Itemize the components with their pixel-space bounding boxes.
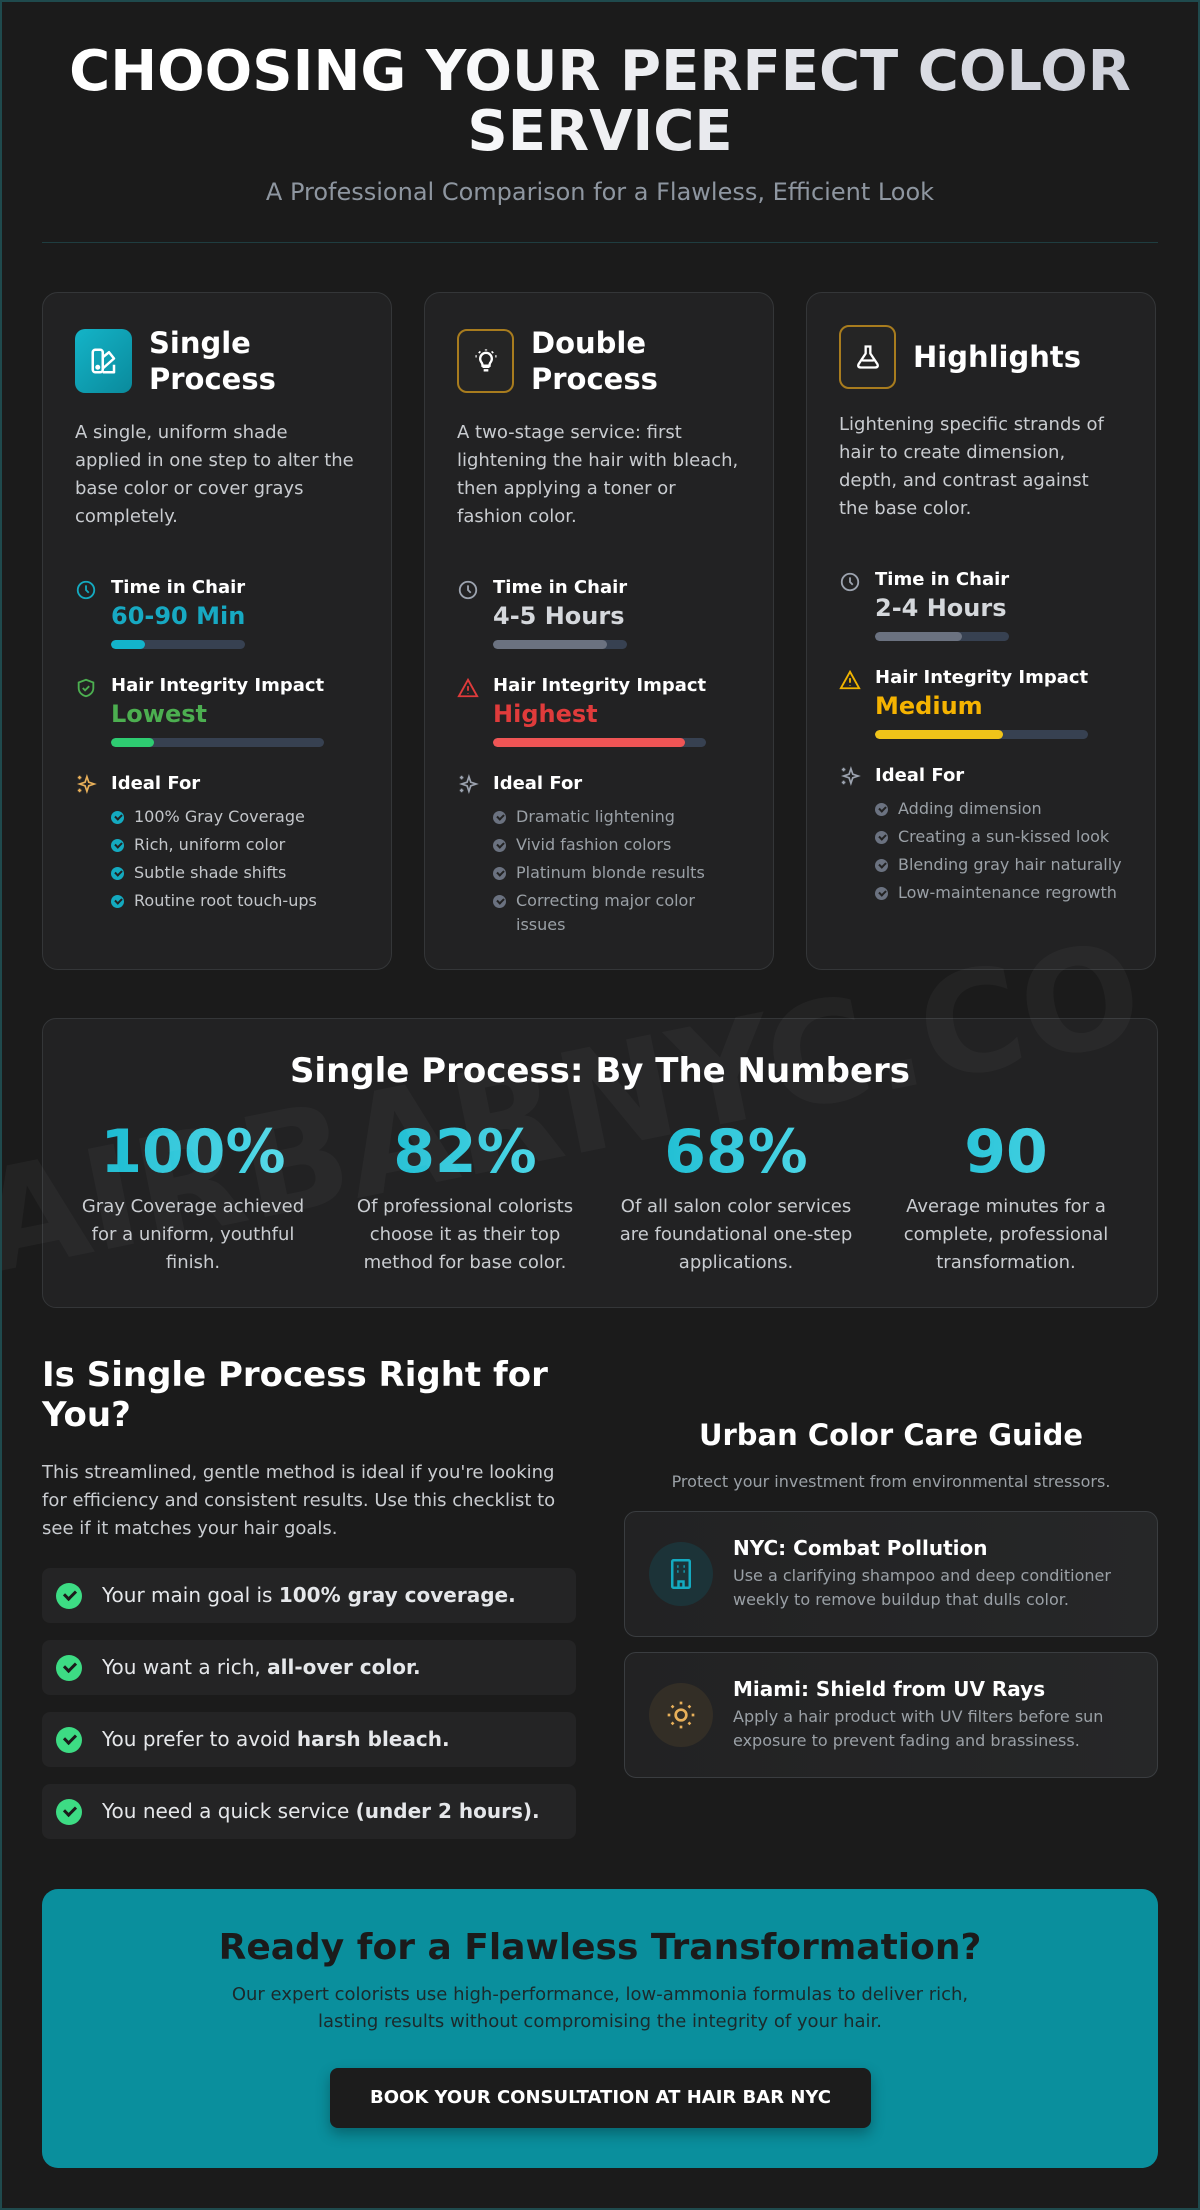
care card: Miami: Apply a hair product with UV filters before sun exposure to prevent fading and brassiness. [733,1707,1103,1750]
stat 100%: 100% [100,1117,286,1187]
care card: NYC [624,1511,1158,1637]
description: applied in one step to alter the [75,450,354,471]
title: CHOOSING YOUR PERFECT COLOR [69,39,1131,104]
description: A two-stage service: first [457,422,682,443]
description: hair to create dimension, [839,442,1065,463]
panel: highlights [806,292,1156,970]
stat 100%: finish. [166,1252,220,1273]
panel: highlights: 2-4 Hours [875,594,1006,622]
metric: integrity [457,675,706,747]
panel: highlights: Low-maintenance regrowth [898,883,1117,902]
panel: single process [42,292,392,970]
panel: single process: Rich, uniform color [134,835,285,854]
CTA text: Our expert colorists use high-performance, low-ammonia formulas to deliver rich, [232,1984,968,2005]
stat 82%: 82% [393,1117,537,1187]
care card: Miami: Miami: Shield from UV Rays [733,1677,1045,1701]
stat 68% [620,1117,852,1273]
panel: double process: 4-5 Hours [493,602,624,630]
care card: NYC: NYC: Combat Pollution [733,1536,987,1560]
panel: double process: Highest [493,700,598,728]
stats heading: Single Process: By The Numbers [290,1051,910,1091]
description: fashion color. [457,506,577,527]
checklist item 1: Your main goal is 100% gray coverage. [102,1583,516,1607]
metric: integrity [839,667,1088,739]
metric: time [840,569,1010,641]
stat 68%: applications. [679,1252,793,1273]
icon: bulb [457,329,514,393]
heading: urban color care: Urban Color Care Guide [699,1418,1083,1452]
stat 90: complete, professional [904,1224,1108,1245]
card title [531,326,658,396]
checklist item 2 [42,1640,576,1695]
stat 82%: choose it as their top [370,1224,560,1245]
panel: highlights: Hair Integrity Impact [875,667,1088,688]
text block: intro: see if it matches your hair goals. [42,1518,338,1539]
checklist item 3 [42,1712,576,1767]
stat 100%: for a uniform, youthful [92,1224,294,1245]
stat 90 [904,1117,1108,1273]
panel: single process: 100% Gray Coverage [134,807,305,826]
stat 100%: Gray Coverage achieved [82,1196,304,1217]
stat 90: Average minutes for a [906,1196,1106,1217]
ideal for list [459,773,705,934]
stat 100% [82,1117,304,1273]
description [75,422,354,527]
panel: double process: Ideal For [493,773,582,794]
description: then applying a toner or [457,478,676,499]
checklist item 4 [42,1784,576,1839]
card title: Double [531,326,646,360]
stat 82% [357,1117,573,1273]
panel: double process: Hair Integrity Impact [493,675,706,696]
panel: double process: Correcting major color [516,891,695,910]
icon: swatch [75,329,132,393]
panel: single process: Hair Integrity Impact [111,675,324,696]
stat 68%: are foundational one-step [620,1224,852,1245]
card title [149,326,276,396]
text block: intro: This streamlined, gentle method is ideal if you're looking [42,1462,554,1483]
description: lightening the hair with bleach, [457,450,738,471]
panel: single process: Ideal For [111,773,200,794]
metric: time [458,577,628,649]
text block: intro: for efficiency and consistent results. Use this checklist to [42,1490,555,1511]
panel: double process [424,292,774,970]
description [457,422,738,527]
description: A single, uniform shade [75,422,288,443]
panel: single process: Routine root touch-ups [134,891,317,910]
card title: Highlights [913,340,1081,374]
title [0,42,1200,162]
heading: is single process right: You? [42,1395,131,1435]
checklist item 4: You need a quick service (under 2 hours). [102,1799,540,1823]
panel: highlights: Time in Chair [875,569,1009,590]
CTA panel [42,1889,1158,2168]
heading: is single process right: Is Single Process Right for [42,1355,548,1395]
panel: stats [42,1018,1158,1308]
CTA button: BOOK YOUR CONSULTATION AT HAIR BAR NYC [370,2087,831,2108]
panel: highlights: Medium [875,692,983,720]
stat 90: 90 [964,1117,1048,1187]
heading: is single process right [42,1355,548,1435]
description [839,414,1104,519]
panel: double process: Dramatic lightening [516,807,675,826]
description: the base color. [839,498,971,519]
icon: building [649,1542,713,1606]
stat 82%: method for base color. [364,1252,566,1273]
checklist item 3: You prefer to avoid harsh bleach. [102,1727,450,1751]
ideal for list [841,765,1122,902]
icon: sun [649,1683,713,1747]
panel: double process: Vivid fashion colors [516,835,671,854]
card title: Single [149,326,251,360]
CTA text [232,1984,968,2032]
panel: highlights: Blending gray hair naturally [898,855,1122,874]
care card: Miami [624,1652,1158,1778]
icon: flask [839,325,896,389]
panel: single process: Subtle shade shifts [134,863,286,882]
text block: intro [42,1462,555,1539]
panel: double process: issues [516,915,565,934]
panel: double process: Time in Chair [493,577,627,598]
checklist item 2: You want a rich, all-over color. [102,1655,421,1679]
ideal for list [77,773,317,910]
card title: Process [531,362,658,396]
description: completely. [75,506,178,527]
stat 90: transformation. [936,1252,1076,1273]
stat 68%: Of all salon color services [621,1196,851,1217]
panel: double process: Platinum blonde results [516,863,705,882]
description: base color or cover grays [75,478,303,499]
panel: single process: 60-90 Min [111,602,245,630]
panel: single process: Time in Chair [111,577,245,598]
CTA heading: Ready for a Flawless Transformation? [219,1927,981,1968]
metric: integrity [78,675,324,747]
panel: highlights: Ideal For [875,765,964,786]
metric: time [76,577,246,649]
description: depth, and contrast against [839,470,1089,491]
subtitle: A Professional Comparison for a Flawless, Efficient Look [266,178,934,206]
CTA text: lasting results without compromising the integrity of your hair. [318,2011,882,2032]
description: Lightening specific strands of [839,414,1104,435]
CTA button [330,2068,871,2128]
panel: highlights: Adding dimension [898,799,1042,818]
panel: single process: Lowest [111,700,207,728]
title: SERVICE [467,99,733,164]
care card: NYC: Use a clarifying shampoo and deep conditioner weekly to remove buildup that dulls color. [733,1566,1111,1609]
stat 82%: Of professional colorists [357,1196,573,1217]
card title: Process [149,362,276,396]
checklist item 1 [42,1568,576,1623]
panel: highlights: Creating a sun-kissed look [898,827,1109,846]
subtitle: care: Protect your investment from environmental stressors. [672,1472,1110,1491]
stat 68%: 68% [664,1117,808,1187]
